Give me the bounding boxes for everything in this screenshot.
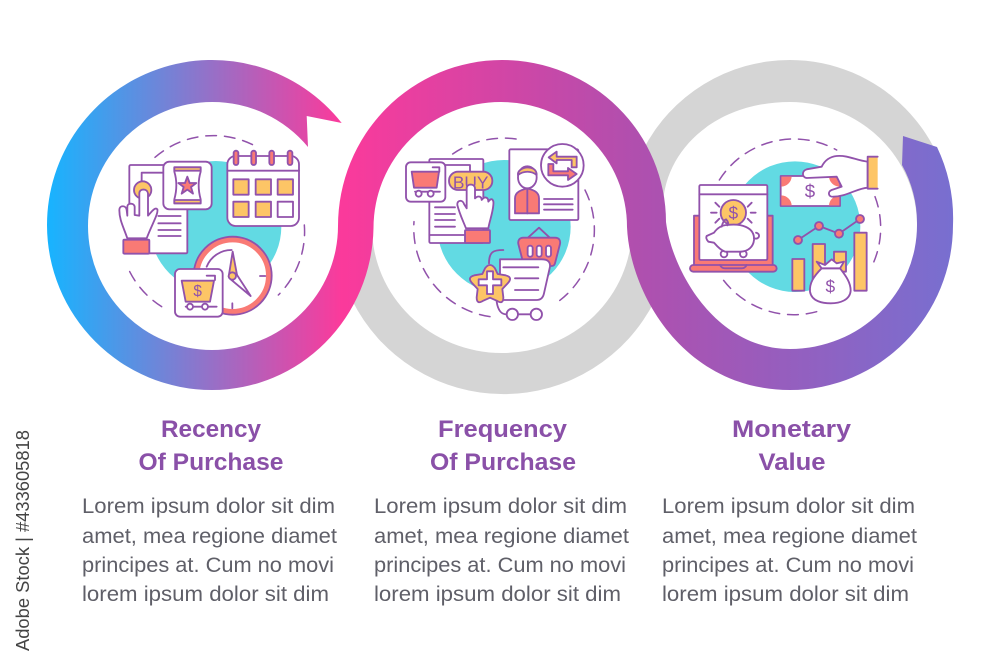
icon: calendar <box>227 151 299 226</box>
heading: monetary value: Monetary <box>732 416 851 443</box>
icon: product page with buy button and hand: BUY <box>453 172 489 192</box>
icon: laptop with piggy bank <box>690 185 777 272</box>
heading: recency of purchase: Recency <box>161 416 261 443</box>
dashed orbit <box>719 139 881 315</box>
text block: monetary: amet, mea regione diamet <box>662 524 917 548</box>
text block: recency: amet, mea regione diamet <box>82 524 337 548</box>
icon group: frequency of purchase <box>406 138 594 320</box>
icon: bar chart with trend line and money bag <box>792 215 867 303</box>
text block: recency: principes at. Cum no movi <box>82 553 334 577</box>
heading: frequency of purchase: Of Purchase <box>430 449 576 476</box>
icon: laptop with piggy bank: $ <box>729 203 739 223</box>
text block: frequency <box>374 494 629 606</box>
icon: document with product card and hand <box>119 162 212 254</box>
icon: customer profile with repeat symbol <box>509 144 584 220</box>
icon: product page with buy button and hand <box>406 159 493 243</box>
stock id label: Adobe Stock | #433605818 <box>13 430 33 651</box>
teal backdrop circle <box>437 160 571 293</box>
gradient ribbon arrow through the three circles <box>47 60 953 390</box>
icon: clock <box>194 237 272 315</box>
icon group: recency of purchase <box>119 136 305 317</box>
icon: basket <box>518 228 560 266</box>
icon: shopping cart card <box>175 269 223 317</box>
gray ring: lower part of middle circle <box>352 227 655 394</box>
teal backdrop circle <box>150 161 281 292</box>
text block: recency: Lorem ipsum dolor sit dim <box>82 494 335 518</box>
text block: monetary: principes at. Cum no movi <box>662 553 914 577</box>
icon: shopping cart card: $ <box>193 283 202 300</box>
gray ring: upper part of right circle <box>643 60 953 225</box>
text block: frequency: principes at. Cum no movi <box>374 553 626 577</box>
icon: shopping cart with plus star <box>470 250 550 320</box>
heading: recency of purchase <box>138 416 284 476</box>
heading: monetary value: Value <box>758 449 826 476</box>
heading: monetary value <box>732 416 851 476</box>
text block: monetary: Lorem ipsum dolor sit dim <box>662 494 915 518</box>
icon: banknote with hand: $ <box>805 181 816 202</box>
icon: bar chart with trend line and money bag: $ <box>826 277 836 297</box>
text block: monetary: lorem ipsum dolor sit dim <box>662 582 909 606</box>
heading: frequency of purchase: Frequency <box>438 416 567 443</box>
text block: recency: lorem ipsum dolor sit dim <box>82 582 329 606</box>
text block: monetary <box>662 494 917 606</box>
text block: frequency: Lorem ipsum dolor sit dim <box>374 494 627 518</box>
heading: frequency of purchase <box>430 416 576 476</box>
teal backdrop circle <box>730 161 860 292</box>
text block: recency <box>82 494 337 606</box>
heading: recency of purchase: Of Purchase <box>138 449 284 476</box>
icon group: monetary value <box>690 139 881 315</box>
dashed orbit <box>414 138 594 317</box>
dashed orbit <box>127 136 305 307</box>
icon: banknote with hand <box>781 156 878 206</box>
text block: frequency: amet, mea regione diamet <box>374 524 629 548</box>
text block: frequency: lorem ipsum dolor sit dim <box>374 582 621 606</box>
